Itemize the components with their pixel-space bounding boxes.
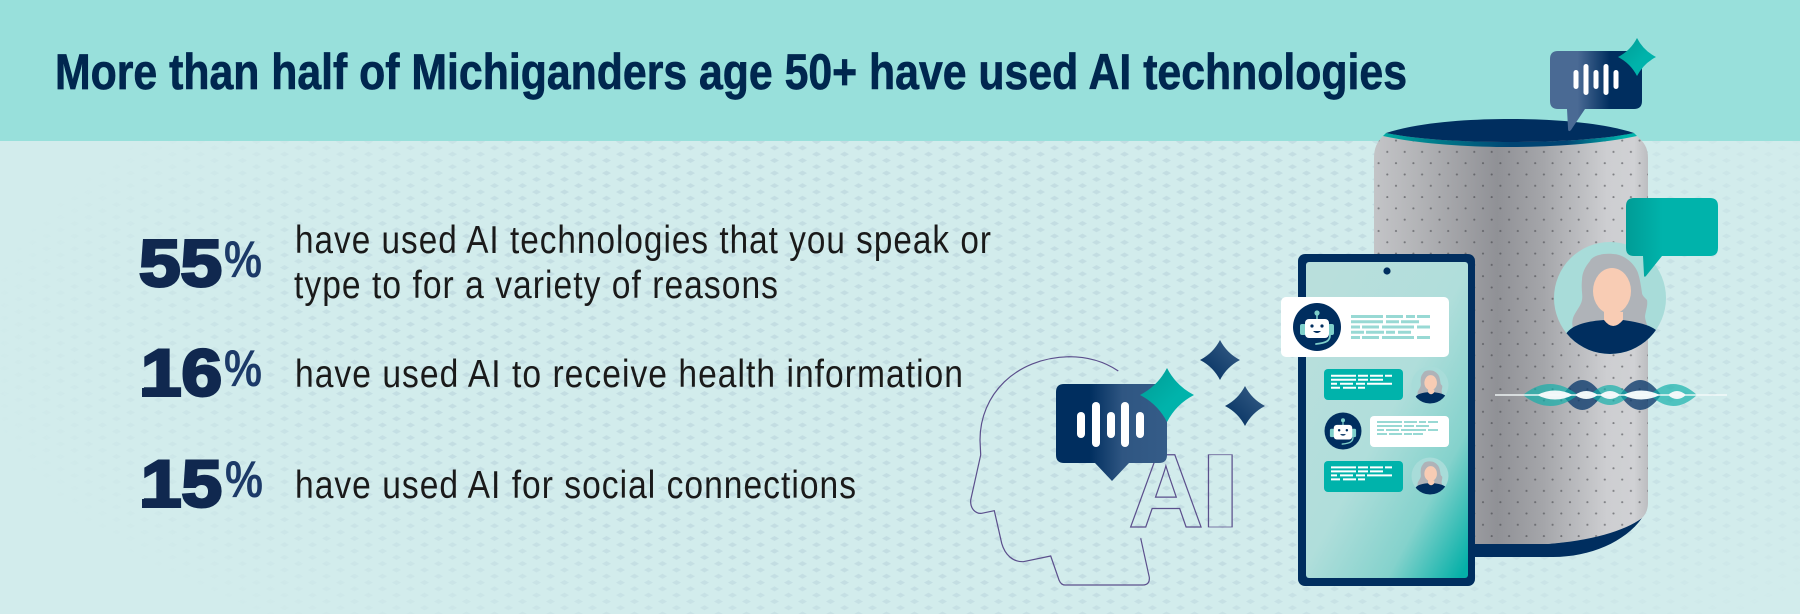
stat: 55% xyxy=(139,219,992,307)
stat: 16% xyxy=(141,336,964,410)
icon: speaker speech bubble xyxy=(1550,51,1642,131)
chat: user message 1 xyxy=(1324,367,1448,405)
phone camera xyxy=(1383,267,1391,275)
chat: bot message large xyxy=(1281,297,1449,357)
icon: navy sparkle upper xyxy=(1200,340,1240,380)
phone frame xyxy=(1298,254,1475,586)
background xyxy=(198,141,1798,614)
phone xyxy=(1281,254,1475,586)
chat: user message 2 xyxy=(1324,458,1448,496)
stat: 55%: type to for a variety of reasons xyxy=(294,264,779,307)
chat: bot message small xyxy=(1325,413,1449,449)
icon: teal sparkle on bubble xyxy=(1618,38,1656,76)
icon: navy sparkle lower xyxy=(1225,386,1265,426)
stat: 15%: % xyxy=(225,451,263,509)
speaker top xyxy=(1386,119,1634,142)
stat: 16%: have used AI to receive health information xyxy=(295,353,964,396)
title: More than half of Michiganders age 50+ have used AI technologies xyxy=(55,44,1407,100)
stat: 16%: % xyxy=(224,340,262,398)
stat: 16%: 16 xyxy=(141,336,222,410)
avatar speech bubble xyxy=(1626,198,1718,277)
stat: 15%: have used AI for social connections xyxy=(295,464,857,507)
speaker base xyxy=(1475,518,1642,557)
voice wave xyxy=(1495,380,1727,410)
stat: 15%: 15 xyxy=(141,446,222,520)
large avatar xyxy=(1554,242,1666,358)
icon: head outline with AI: I xyxy=(1198,433,1243,550)
speaker rim xyxy=(1383,133,1637,147)
icon: head outline with AI: A xyxy=(1128,433,1204,550)
stat: 55%: 55 xyxy=(139,226,222,300)
stat: 55%: % xyxy=(224,231,262,289)
phone screen xyxy=(1306,262,1468,578)
icon: head outline with AI xyxy=(971,357,1243,585)
header band xyxy=(0,0,1800,141)
stat: 55%: have used AI technologies that you speak or xyxy=(295,219,992,262)
stat: 15% xyxy=(141,446,857,520)
icon: head speech bubble xyxy=(1056,384,1167,481)
smart speaker xyxy=(1374,119,1648,557)
speaker body xyxy=(1374,136,1648,544)
icon: teal sparkle xyxy=(1140,368,1194,422)
